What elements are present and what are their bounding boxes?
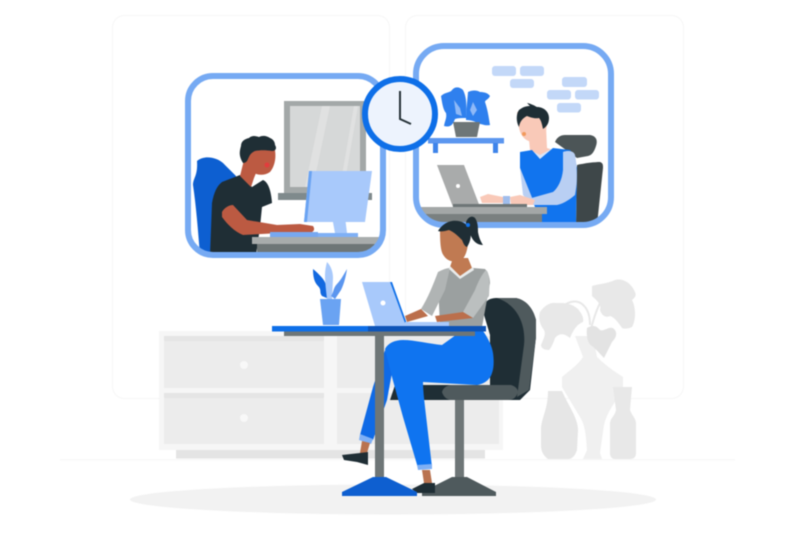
icon: clock xyxy=(365,79,435,149)
near leg and hips xyxy=(385,331,494,493)
laptop xyxy=(362,282,449,326)
man in black shirt xyxy=(210,136,314,255)
keyboard xyxy=(270,232,318,237)
potted plant on shelf xyxy=(428,87,504,153)
table xyxy=(272,326,486,496)
window xyxy=(278,101,372,200)
chair xyxy=(555,135,603,225)
office chair xyxy=(390,298,536,496)
wall bricks xyxy=(492,66,599,112)
floor shadow xyxy=(130,484,656,514)
panel: left video call frame xyxy=(188,76,383,256)
far leg xyxy=(342,350,393,465)
panel: right video call frame xyxy=(416,46,611,225)
desk xyxy=(251,236,380,253)
hands xyxy=(405,309,473,322)
floor line xyxy=(60,459,735,460)
desk xyxy=(420,207,547,225)
faded plant and vases xyxy=(539,279,636,459)
man in blue vest xyxy=(480,103,577,225)
chair xyxy=(193,157,236,255)
desktop monitor xyxy=(304,171,372,237)
woman working on laptop xyxy=(342,217,494,493)
laptop xyxy=(437,165,527,207)
plant on table xyxy=(313,262,347,325)
panel: faint background cards xyxy=(112,16,684,398)
illustration: remote video meeting xyxy=(130,42,656,514)
cabinet xyxy=(159,331,503,458)
neck and sweater xyxy=(421,258,490,327)
head and ponytail xyxy=(438,217,483,262)
